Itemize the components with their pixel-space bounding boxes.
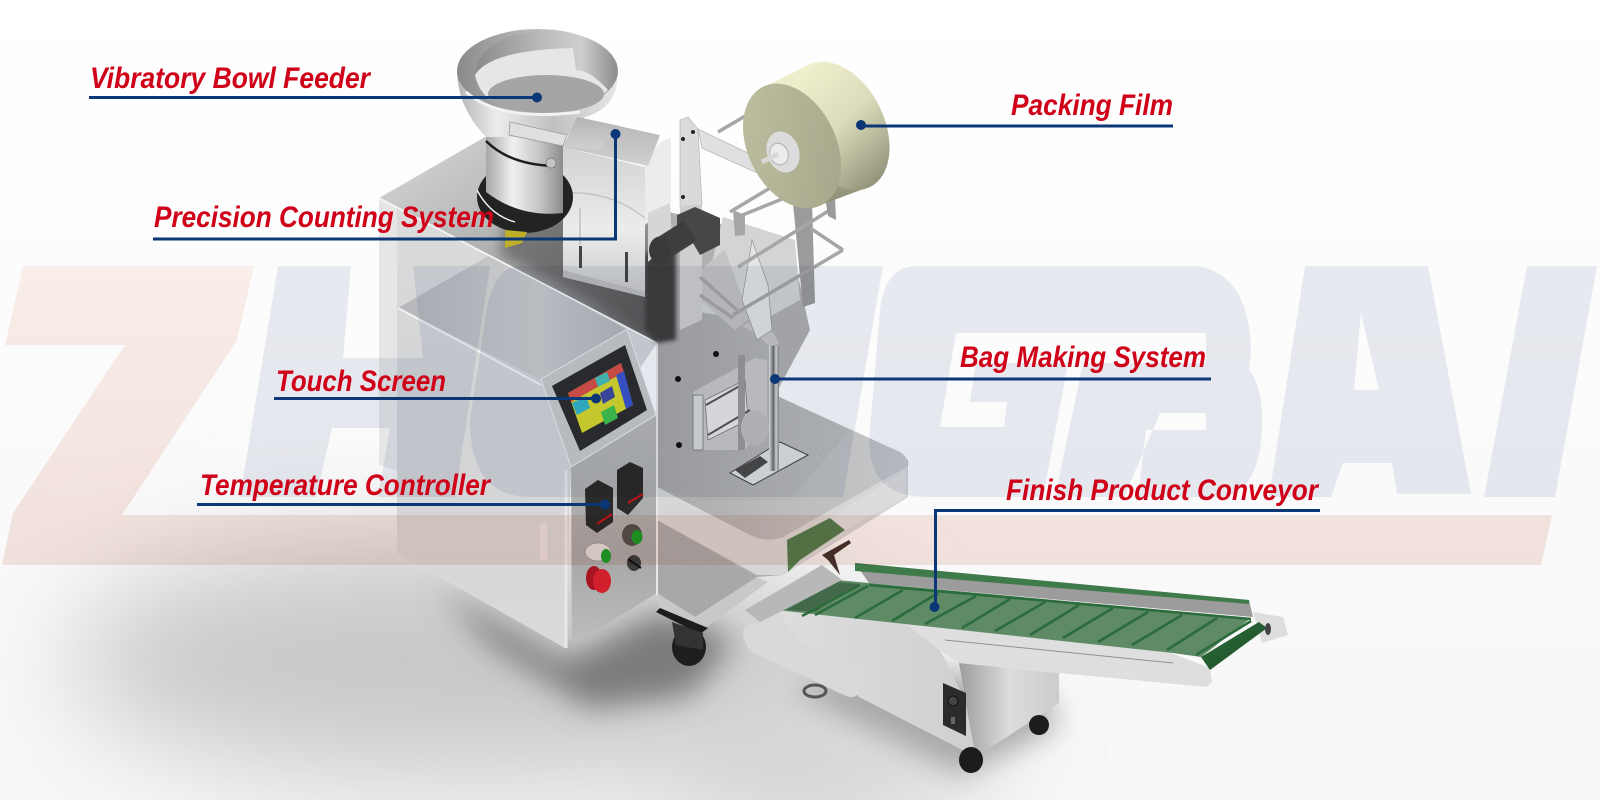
label: Bag Making System	[770, 341, 1211, 384]
label: Packing Film	[856, 89, 1173, 130]
belt cleats	[802, 585, 1251, 655]
shelf chute bracket	[822, 540, 851, 575]
label: Finish Product Conveyor	[930, 474, 1320, 612]
conveyor end bracket	[1253, 612, 1288, 643]
label: Finish Product Conveyor: Finish Product Conveyor	[1006, 474, 1320, 507]
conveyor far wall	[855, 563, 1253, 617]
conveyor casters	[804, 685, 1049, 773]
label: Touch Screen: Touch Screen	[276, 365, 446, 398]
green belt	[776, 580, 1251, 657]
label: Packing Film: Packing Film	[1011, 89, 1173, 122]
label: Touch Screen	[274, 365, 601, 404]
label: Precision Counting System	[153, 129, 620, 239]
conveyor capsule bracket	[743, 620, 860, 697]
label: Bag Making System: Bag Making System	[960, 341, 1206, 374]
vibratory bowl feeder	[457, 29, 620, 248]
film roll	[724, 46, 909, 225]
conveyor control box	[943, 683, 966, 736]
label: Vibratory Bowl Feeder	[89, 62, 542, 102]
temperature controllers and buttons	[585, 462, 643, 593]
label: Vibratory Bowl Feeder: Vibratory Bowl Feeder	[90, 62, 372, 95]
motor	[649, 207, 720, 264]
watermark: ZHONGBAI logo letters	[2, 266, 1597, 565]
label: Temperature Controller	[197, 469, 610, 510]
machine: film path frame and rods	[680, 115, 843, 340]
machine: column and shelf	[645, 210, 908, 632]
conveyor far-wall green edge	[855, 563, 1249, 604]
finish product conveyor	[743, 540, 1288, 773]
precision counting system housing	[563, 117, 672, 297]
belt dark left section	[786, 582, 860, 612]
label: Precision Counting System: Precision Counting System	[154, 201, 494, 234]
touch screen panel	[541, 329, 656, 467]
conveyor lower body	[776, 610, 1212, 757]
main machine caster	[656, 608, 708, 666]
bag making system	[693, 320, 808, 485]
machine: main cabinet	[379, 137, 672, 648]
belt end roller	[1201, 622, 1267, 670]
label: Temperature Controller: Temperature Controller	[200, 469, 492, 502]
